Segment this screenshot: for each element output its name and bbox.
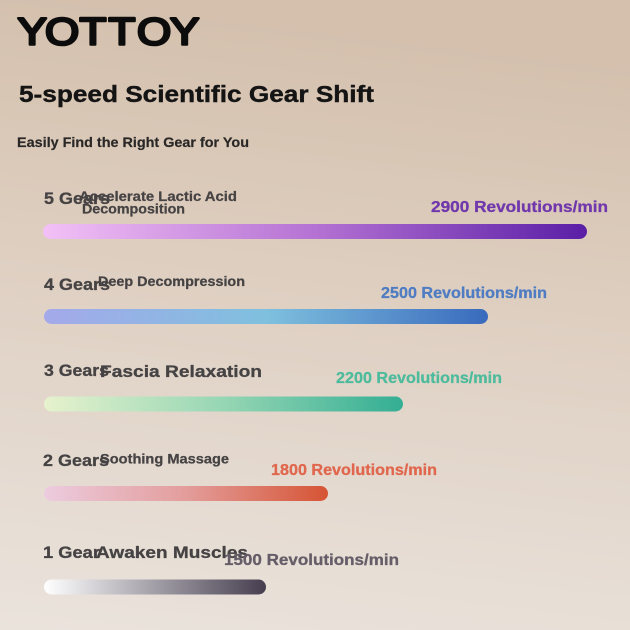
row: 2 gears [43,451,437,501]
title: 5-speed Scientific Gear Shift [19,81,374,107]
bar: 1 gear [44,580,266,594]
description: Accelerate Lactic Acid Decomposition: Decomposition [82,202,185,216]
description: Awaken Muscles: Awaken Muscles [96,543,248,562]
subtitle: Easily Find the Right Gear for You [17,134,249,150]
gear label: 4 Gears: 4 Gears [44,275,110,294]
bar: 3 gears [44,396,403,412]
row: 3 gears [44,361,502,412]
bar: 4 gears [44,309,488,324]
speed: 1800 Revolutions/min: 1800 Revolutions/min [271,462,437,479]
description: Soothing Massage: Soothing Massage [100,452,230,466]
description: Accelerate Lactic Acid Decomposition: Accelerate Lactic Acid [79,189,237,204]
row: 5 gears [43,189,608,239]
speed: 2900 Revolutions/min: 2900 Revolutions/min [431,199,608,216]
speed: 2500 Revolutions/min: 2500 Revolutions/min [381,285,547,302]
description: Deep Decompression: Deep Decompression [98,274,245,289]
gear label: 5 Gears: 5 Gears [44,189,110,208]
row: 1 gear [43,543,399,594]
bar: 5 gears [43,224,587,239]
gear label: 3 Gears: 3 Gears [44,361,109,380]
gear label: 2 Gears: 2 Gears [43,451,109,470]
speed: 2200 Revolutions/min: 2200 Revolutions/min [336,370,502,387]
description: Accelerate Lactic Acid Decomposition [79,189,237,216]
bar: 2 gears [44,486,328,501]
description: Fascia Relaxation: Fascia Relaxation [100,362,262,381]
row: 4 gears [44,274,547,324]
gear label: 1 Gear: 1 Gear [43,543,100,562]
speed: 1500 Revolutions/min: 1500 Revolutions/min [224,552,399,569]
logo: YOTTOY: YOTTOY [18,10,199,53]
